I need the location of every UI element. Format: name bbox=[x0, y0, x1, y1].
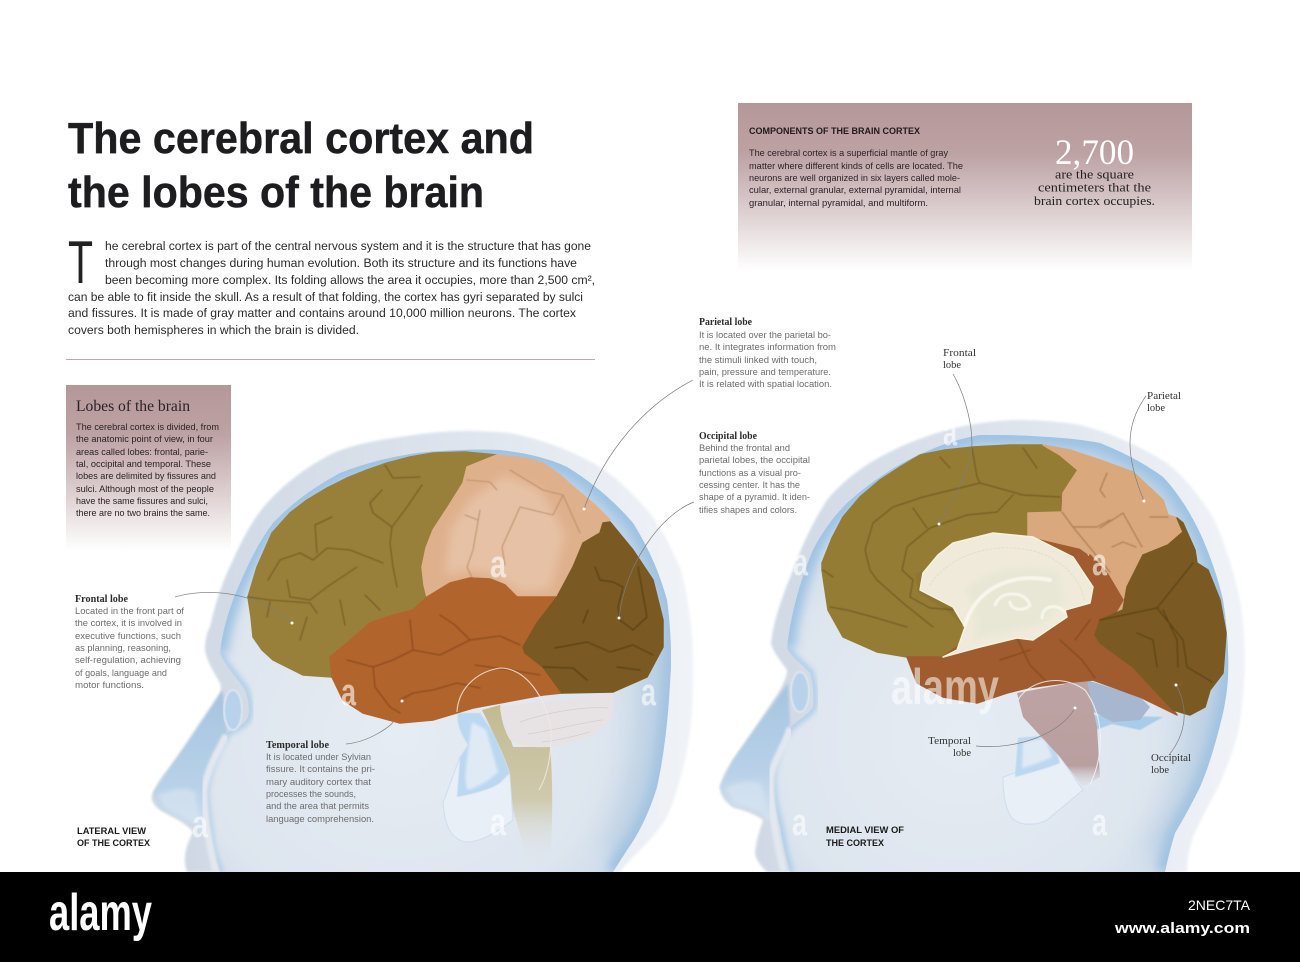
text block: temporal lobe: Temporal lobe bbox=[266, 740, 330, 751]
text block: frontal lobe bbox=[75, 594, 184, 690]
components text: matter where different kinds of cells are located. The bbox=[749, 160, 963, 171]
text block: parietal lobe: pain, pressure and temperature. bbox=[699, 367, 831, 377]
view label: lateral bbox=[77, 825, 151, 848]
statistic: 2,700: 2,700 bbox=[1055, 132, 1134, 172]
occipital lobe bbox=[1095, 518, 1226, 715]
text block: parietal lobe bbox=[699, 317, 836, 389]
components text: neurons are well organized in six layers called mole- bbox=[749, 172, 960, 183]
watermark marks: a bbox=[792, 802, 808, 844]
illustration: left head, lateral view bbox=[152, 430, 693, 872]
drop cap: T bbox=[68, 229, 93, 296]
occipital lobe bbox=[523, 522, 663, 693]
text block: temporal lobe bbox=[266, 740, 375, 824]
watermark marks: a bbox=[641, 672, 657, 714]
text block: temporal lobe: language comprehension. bbox=[266, 814, 374, 824]
intro paragraph with drop cap: and fissures. It is made of gray matter and contains around 10,000 million neurons. The cortex bbox=[68, 306, 577, 320]
text block: frontal lobe: executive functions, such bbox=[75, 631, 181, 641]
panel text: The cerebral cortex is divided, from bbox=[76, 421, 219, 432]
watermark marks: a bbox=[1092, 542, 1108, 584]
cerebellum bbox=[500, 693, 614, 747]
eye socket bbox=[791, 672, 809, 712]
label: parietal lobe medial: Parietal bbox=[1147, 391, 1181, 402]
head outline band bbox=[720, 420, 1245, 872]
text block: occipital lobe: cessing center. It has the bbox=[699, 480, 800, 490]
spinal cord bbox=[482, 705, 552, 862]
text block: temporal lobe: mary auditory cortex that bbox=[266, 777, 371, 787]
label: occipital lobe medial bbox=[1151, 753, 1191, 776]
text block: temporal lobe: processes the sounds, bbox=[266, 789, 356, 799]
parietal lobe bbox=[422, 455, 610, 597]
text block: parietal lobe: ne. It integrates information from bbox=[699, 342, 836, 352]
watermark marks: a bbox=[341, 672, 357, 714]
panel text: sulci. Although most of the people bbox=[76, 483, 214, 494]
label: frontal lobe medial: Frontal bbox=[943, 348, 976, 359]
auditory canal loop bbox=[1018, 681, 1100, 785]
ear and jaw bbox=[443, 713, 513, 842]
panel text: there are no two brains the same. bbox=[76, 507, 210, 518]
text block: frontal lobe: Located in the front part of bbox=[75, 606, 184, 616]
label: parietal lobe medial bbox=[1147, 391, 1181, 414]
text block: frontal lobe: Frontal lobe bbox=[75, 594, 129, 605]
intro paragraph with drop cap: he cerebral cortex is part of the central nervous system and it is the structure that has gone bbox=[105, 239, 591, 253]
components heading: COMPONENTS OF THE BRAIN CORTEX bbox=[749, 126, 921, 136]
text block: temporal lobe: fissure. It contains the pri- bbox=[266, 764, 375, 774]
ear and jaw bbox=[1003, 735, 1083, 824]
components text: The cerebral cortex is a superficial mantle of gray bbox=[749, 147, 948, 158]
watermark marks: a bbox=[490, 544, 507, 586]
temporal lobe bbox=[907, 555, 1177, 715]
text block: frontal lobe: of goals, language and bbox=[75, 668, 167, 678]
watermark marks: a bbox=[192, 804, 209, 846]
title bbox=[68, 114, 534, 217]
components text: granular, internal pyramidal, and multiform. bbox=[749, 197, 928, 208]
view label: medial bbox=[826, 824, 904, 848]
panel heading: Lobes of the brain bbox=[76, 398, 190, 415]
divider bbox=[66, 359, 595, 360]
watermark marks: a bbox=[943, 412, 958, 454]
brainstem bbox=[1017, 680, 1100, 787]
label: temporal lobe medial: lobe bbox=[953, 748, 971, 759]
text block: frontal lobe: self-regulation, achieving bbox=[75, 655, 181, 665]
text block: occipital lobe: shape of a pyramid. It iden- bbox=[699, 492, 810, 502]
panel: components of the brain cortex bbox=[738, 103, 1192, 271]
leader lines bbox=[175, 374, 1184, 755]
image id: 2NEC7TA bbox=[1188, 897, 1251, 913]
panel text: lobes are delimited by fissures and bbox=[76, 470, 216, 481]
text block: temporal lobe: and the area that permits bbox=[266, 801, 369, 811]
nose bbox=[153, 690, 227, 837]
text block: parietal lobe: the stimuli linked with touch, bbox=[699, 355, 817, 365]
components text: cular, external granular, external pyramidal, internal bbox=[749, 184, 961, 195]
head interior bbox=[207, 450, 671, 872]
intro paragraph with drop cap bbox=[68, 229, 595, 337]
title: The cerebral cortex and bbox=[68, 114, 534, 163]
text block: occipital lobe: tifies shapes and colors. bbox=[699, 505, 797, 515]
label: frontal lobe medial bbox=[943, 348, 976, 371]
watermark marks bbox=[192, 412, 1108, 846]
website: www.alamy.com bbox=[1114, 920, 1250, 937]
frontal lobe bbox=[822, 445, 1078, 657]
view label: lateral: OF THE CORTEX bbox=[77, 837, 151, 848]
nose bbox=[720, 683, 790, 820]
label: parietal lobe medial: lobe bbox=[1147, 403, 1165, 414]
watermark marks: a bbox=[793, 542, 809, 584]
panel text: the anatomic point of view, in four bbox=[76, 433, 213, 444]
watermark marks: a bbox=[490, 802, 507, 844]
statistic: 2,700: brain cortex occupies. bbox=[1034, 193, 1155, 208]
components text bbox=[749, 147, 963, 208]
temporal lobe bbox=[330, 578, 562, 723]
parietal lobe bbox=[1028, 445, 1183, 617]
text block: frontal lobe: as planning, reasoning, bbox=[75, 643, 171, 653]
label: temporal lobe medial bbox=[928, 736, 971, 759]
panel: lobes of the brain bbox=[66, 385, 231, 551]
eye socket bbox=[224, 690, 242, 730]
panel text: tal, occipital and temporal. These bbox=[76, 458, 211, 469]
label: occipital lobe medial: Occipital bbox=[1151, 753, 1191, 764]
facial strip bbox=[771, 728, 790, 872]
intro paragraph with drop cap: through most changes during human evolution. Both its structure and its functions have bbox=[105, 256, 577, 270]
text block: frontal lobe: motor functions. bbox=[75, 680, 144, 690]
watermark marks: alamy bbox=[891, 659, 999, 715]
label: frontal lobe medial: lobe bbox=[943, 360, 961, 371]
cerebellum bbox=[1087, 680, 1163, 732]
head outline band bbox=[152, 431, 693, 872]
facial strip bbox=[204, 735, 226, 872]
panel text: areas called lobes: frontal, parie- bbox=[76, 446, 208, 457]
auditory canal loop bbox=[457, 668, 551, 790]
text block: occipital lobe: Occipital lobe bbox=[699, 431, 758, 442]
watermark marks: a bbox=[1092, 802, 1108, 844]
statistic: 2,700: are the square bbox=[1055, 166, 1134, 182]
frontal lobe bbox=[248, 452, 497, 677]
text block: temporal lobe: It is located under Sylvian bbox=[266, 752, 371, 762]
intro paragraph with drop cap: can be able to fit inside the skull. As a result of that folding, the cortex has gyri separated by sulci bbox=[68, 290, 583, 304]
label: temporal lobe medial: Temporal bbox=[928, 736, 971, 747]
text block: occipital lobe: Behind the frontal and bbox=[699, 443, 790, 453]
footer bar bbox=[0, 872, 1300, 962]
intro paragraph with drop cap: been becoming more complex. Its folding allows the area it occupies, more than 2,500 cm², bbox=[105, 273, 595, 287]
callout dots bbox=[290, 500, 1178, 710]
text block: occipital lobe bbox=[699, 431, 810, 515]
head interior bbox=[765, 420, 1235, 872]
intro paragraph with drop cap: covers both hemispheres in which the brain is divided. bbox=[68, 323, 359, 337]
text block: parietal lobe: It is related with spatial location. bbox=[699, 379, 832, 389]
text block: parietal lobe: Parietal lobe bbox=[699, 317, 753, 328]
view label: lateral: LATERAL VIEW bbox=[77, 825, 146, 836]
view label: medial: MEDIAL VIEW OF bbox=[826, 824, 904, 835]
panel text bbox=[76, 421, 219, 518]
text block: parietal lobe: It is located over the parietal bo- bbox=[699, 330, 831, 340]
text block: frontal lobe: the cortex, it is involved in bbox=[75, 618, 182, 628]
view label: medial: THE CORTEX bbox=[826, 837, 885, 848]
statistic: 2,700 bbox=[1034, 132, 1155, 208]
corpus callosum and diencephalon bbox=[920, 533, 1093, 657]
label: occipital lobe medial: lobe bbox=[1151, 765, 1169, 776]
title: the lobes of the brain bbox=[68, 168, 484, 217]
text block: occipital lobe: parietal lobes, the occipital bbox=[699, 455, 810, 465]
alamy logo: alamy bbox=[49, 884, 152, 942]
text block: occipital lobe: functions as a visual pro- bbox=[699, 468, 801, 478]
illustration: right head, medial view bbox=[720, 420, 1245, 872]
panel text: have the same fissures and sulci, bbox=[76, 495, 208, 506]
statistic: 2,700: centimeters that the bbox=[1038, 180, 1151, 194]
base under callosum bbox=[905, 525, 1105, 665]
